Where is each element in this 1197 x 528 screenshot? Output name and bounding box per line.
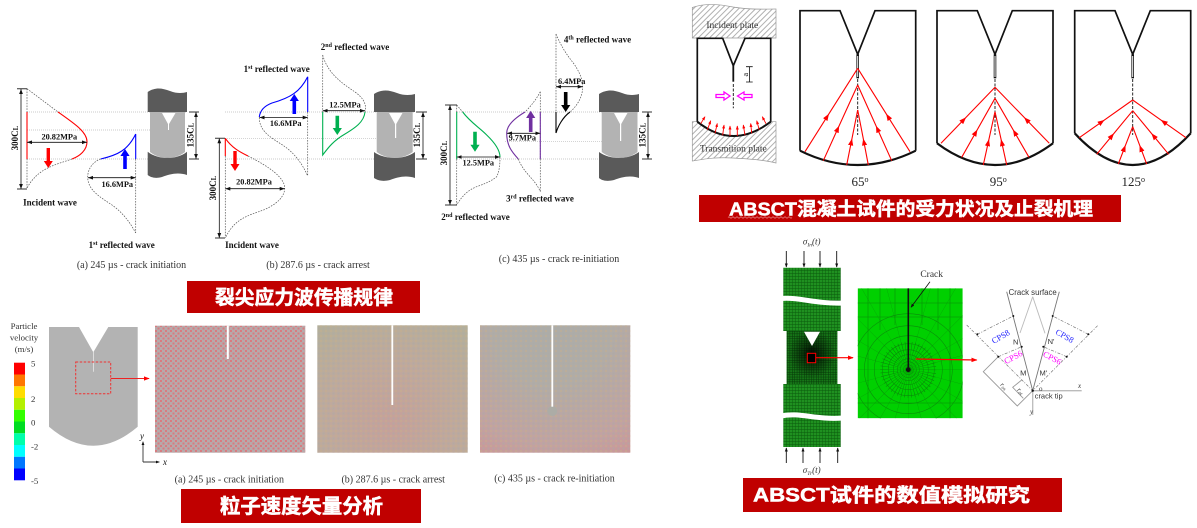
- specimen 95 degrees: [937, 11, 1053, 189]
- colour legend: -5: [31, 476, 39, 486]
- specimen 125 degrees: [1075, 11, 1191, 189]
- wave label: nd: [446, 213, 453, 219]
- 16.6MPa label: [260, 118, 308, 128]
- crack tip schematic: CPS8: [990, 327, 1011, 346]
- wave label: reflected wave: [574, 35, 631, 45]
- vector field b: [317, 325, 468, 453]
- transmission plate: [692, 122, 776, 163]
- 16.6MPa label: 16.6MPa: [270, 119, 302, 128]
- 135CL dimension: [412, 112, 427, 159]
- crack tip schematic: [967, 288, 1098, 416]
- sigma in label: (t): [812, 236, 820, 246]
- vector field c: [480, 325, 630, 453]
- heading: numerical simulation: [743, 478, 1062, 512]
- sigma tr label: (t): [812, 465, 821, 475]
- panel: numerical model: [781, 236, 1098, 477]
- 20.82MPa label: [27, 132, 87, 142]
- 9.7MPa label: 9.7MPa: [509, 134, 537, 143]
- caption a: (a) 245 µs - crack initiation: [175, 475, 284, 486]
- caption c: (c) 435 µs - crack re-initiation: [494, 473, 615, 484]
- heading: ABSCT loading and crack arrest: ABSCT混凝土试件的受力状况及止裂机理: [729, 198, 1094, 220]
- heading: numerical simulation: ABSCT试件的数值模拟研究: [753, 484, 1030, 506]
- arrow: blue up: [290, 94, 299, 114]
- 300CL dimension: [10, 89, 27, 189]
- arrow: zoom: [111, 378, 149, 380]
- colour legend: [14, 358, 39, 486]
- wave label: reflected wave: [452, 212, 510, 222]
- wave label: 2: [441, 212, 446, 222]
- heading: ABSCT loading and crack arrest: [699, 195, 1121, 222]
- panel: crack tip stress wave (b): [208, 42, 427, 271]
- crack tip schematic: o: [1039, 385, 1043, 393]
- wave label: 2: [321, 42, 325, 52]
- panel: crack tip stress wave (a): [10, 88, 199, 271]
- dimension a: a: [741, 72, 750, 76]
- incident plate: [692, 4, 776, 38]
- colour legend: 2: [31, 394, 35, 404]
- sigma in label: In: [806, 242, 812, 248]
- specimen 125 degrees: 125: [1122, 174, 1141, 189]
- vector field a: [155, 326, 305, 453]
- wave label: reflected wave: [517, 194, 574, 204]
- axes: x: [162, 457, 167, 467]
- wave label: 4: [564, 35, 568, 45]
- axes: y: [139, 431, 144, 441]
- incident wave curve: [27, 89, 87, 188]
- crack tip schematic: CPS6: [1002, 348, 1024, 366]
- crack tip schematic: N': [1048, 337, 1055, 346]
- crack tip schematic: crack tip: [1035, 392, 1063, 400]
- top load arrows: [786, 251, 837, 267]
- crack tip schematic: CPS8: [1054, 327, 1076, 345]
- legend title: Particle: [11, 321, 38, 331]
- specimen schematic: [697, 38, 771, 136]
- 12.5MPa label: [457, 157, 500, 168]
- specimen c: [599, 90, 639, 181]
- crack tip schematic: M': [1039, 368, 1048, 378]
- caption b: (b) 287.6 µs - crack arrest: [341, 475, 445, 486]
- crack label: [911, 270, 943, 307]
- specimen 65 degrees: [800, 11, 916, 189]
- 300CL dimension: [208, 138, 225, 238]
- sigma in label: σ: [803, 236, 807, 246]
- colour legend: 5: [31, 358, 36, 368]
- wave label: 1: [244, 64, 248, 74]
- arrow: mesh to schematic: [916, 359, 977, 360]
- heading: particle velocity analysis: 粒子速度矢量分析: [220, 495, 383, 518]
- arrow: red down: [44, 148, 53, 168]
- arrow: blue up: [120, 149, 130, 169]
- bottom load arrows: [786, 448, 838, 463]
- incident plate: Incident plate: [706, 21, 758, 31]
- fourth reflected wave curve: [556, 34, 583, 133]
- arrow: green down: [470, 132, 480, 152]
- crack tip schematic: y: [1029, 408, 1034, 416]
- 16.6MPa label: 16.6MPa: [102, 180, 134, 189]
- specimen overview: [49, 327, 138, 446]
- 135CL dimension: 135CL: [412, 122, 422, 147]
- 12.5MPa label: 12.5MPa: [463, 159, 495, 168]
- arrow: black down: [561, 92, 570, 112]
- axes: [139, 431, 167, 467]
- crack tip schematic: x: [1077, 382, 1082, 390]
- 300CL dimension: 300CL: [208, 175, 218, 200]
- 300CL dimension: 300CL: [439, 140, 449, 165]
- 20.82MPa label: 20.82MPa: [41, 132, 78, 141]
- wave label: 3: [506, 194, 511, 204]
- crack tip schematic: N: [1013, 338, 1018, 346]
- legend title: (m/s): [15, 344, 33, 354]
- colour legend: 0: [31, 418, 36, 428]
- panel: particle velocity: [10, 321, 630, 486]
- third reflected wave curve: [507, 92, 540, 192]
- arrow: green down: [333, 116, 342, 135]
- crack tip schematic: r: [1015, 386, 1023, 394]
- arrow: red down: [230, 151, 240, 171]
- wave labels: Incident wave: [23, 198, 77, 208]
- 12.5MPa label: 12.5MPa: [329, 101, 362, 110]
- dimension a: [741, 67, 753, 82]
- wave label: reflected wave: [332, 42, 389, 52]
- wave label: th: [568, 36, 574, 42]
- 12.5MPa label: [323, 101, 365, 111]
- 20.82MPa label: 20.82MPa: [236, 177, 273, 186]
- panel: ABSCT loading schematic: [692, 4, 1191, 189]
- caption b: (b) 287.6 µs - crack arrest: [266, 260, 370, 271]
- 135CL dimension: [638, 112, 652, 159]
- wave label: reflected wave: [252, 64, 310, 74]
- arrow: zoom to mesh: [816, 357, 853, 359]
- 20.82MPa label: [225, 177, 285, 189]
- first reflected wave curve: [88, 134, 136, 233]
- 300CL dimension: 300CL: [10, 125, 20, 150]
- wave label: 1: [89, 240, 93, 250]
- colour legend: -2: [31, 442, 38, 452]
- panel: crack tip stress wave (c): [439, 34, 652, 265]
- 135CL dimension: [186, 112, 199, 159]
- crack tip schematic: r: [998, 381, 1006, 388]
- 300CL dimension: [439, 105, 457, 205]
- incident wave curve: [225, 138, 285, 238]
- 16.6MPa label: [88, 178, 136, 189]
- crack tip mesh: [858, 288, 963, 418]
- crack tip schematic: ot: [1017, 391, 1023, 398]
- wave label: st: [248, 65, 252, 71]
- hollow magenta arrows: [716, 92, 752, 100]
- heading: particle velocity analysis: [181, 489, 421, 523]
- specimen a: [148, 88, 187, 178]
- 135CL dimension: 135CL: [638, 122, 648, 147]
- crack tip schematic: M: [1020, 368, 1026, 378]
- caption c: (c) 435 µs - crack re-initiation: [499, 254, 619, 265]
- sigma tr label: Tr: [807, 471, 813, 477]
- crack tip schematic: Crack surface: [1009, 288, 1057, 297]
- arrow: purple up: [526, 111, 535, 132]
- red stress arrows: [701, 117, 766, 136]
- 135CL dimension: 135CL: [186, 122, 196, 147]
- 6.4MPa label: 6.4MPa: [558, 77, 586, 86]
- specimen 125 degrees: o: [1141, 175, 1145, 184]
- sigma tr label: σ: [803, 465, 807, 475]
- specimen 95 degrees: 95: [990, 174, 1003, 189]
- specimen 65 degrees: 65: [852, 174, 864, 189]
- heading: crack tip stress wave: 裂尖应力波传播规律: [215, 286, 393, 309]
- wave label: reflected wave: [97, 240, 155, 250]
- legend title: velocity: [10, 332, 39, 342]
- caption a: (a) 245 µs - crack initiation: [77, 260, 186, 271]
- heading: crack tip stress wave: [187, 281, 420, 313]
- wave label: rd: [511, 195, 517, 201]
- wave label: nd: [325, 43, 333, 49]
- crack tip schematic: CPS6: [1041, 349, 1063, 367]
- crack label: Crack: [920, 270, 943, 280]
- specimen 95 degrees: o: [1003, 175, 1007, 184]
- transmission plate: Transmition plate: [700, 144, 767, 154]
- meshed specimen: [781, 268, 843, 447]
- second reflected wave curve: [323, 55, 366, 155]
- wave label: st: [93, 241, 97, 247]
- wave label: Incident wave: [225, 240, 279, 250]
- specimen b: [374, 90, 415, 181]
- specimen 65 degrees: o: [864, 175, 868, 184]
- crack tip schematic: os: [1000, 386, 1006, 392]
- second reflected wave curve: [457, 105, 500, 205]
- first reflected wave curve: [259, 77, 308, 176]
